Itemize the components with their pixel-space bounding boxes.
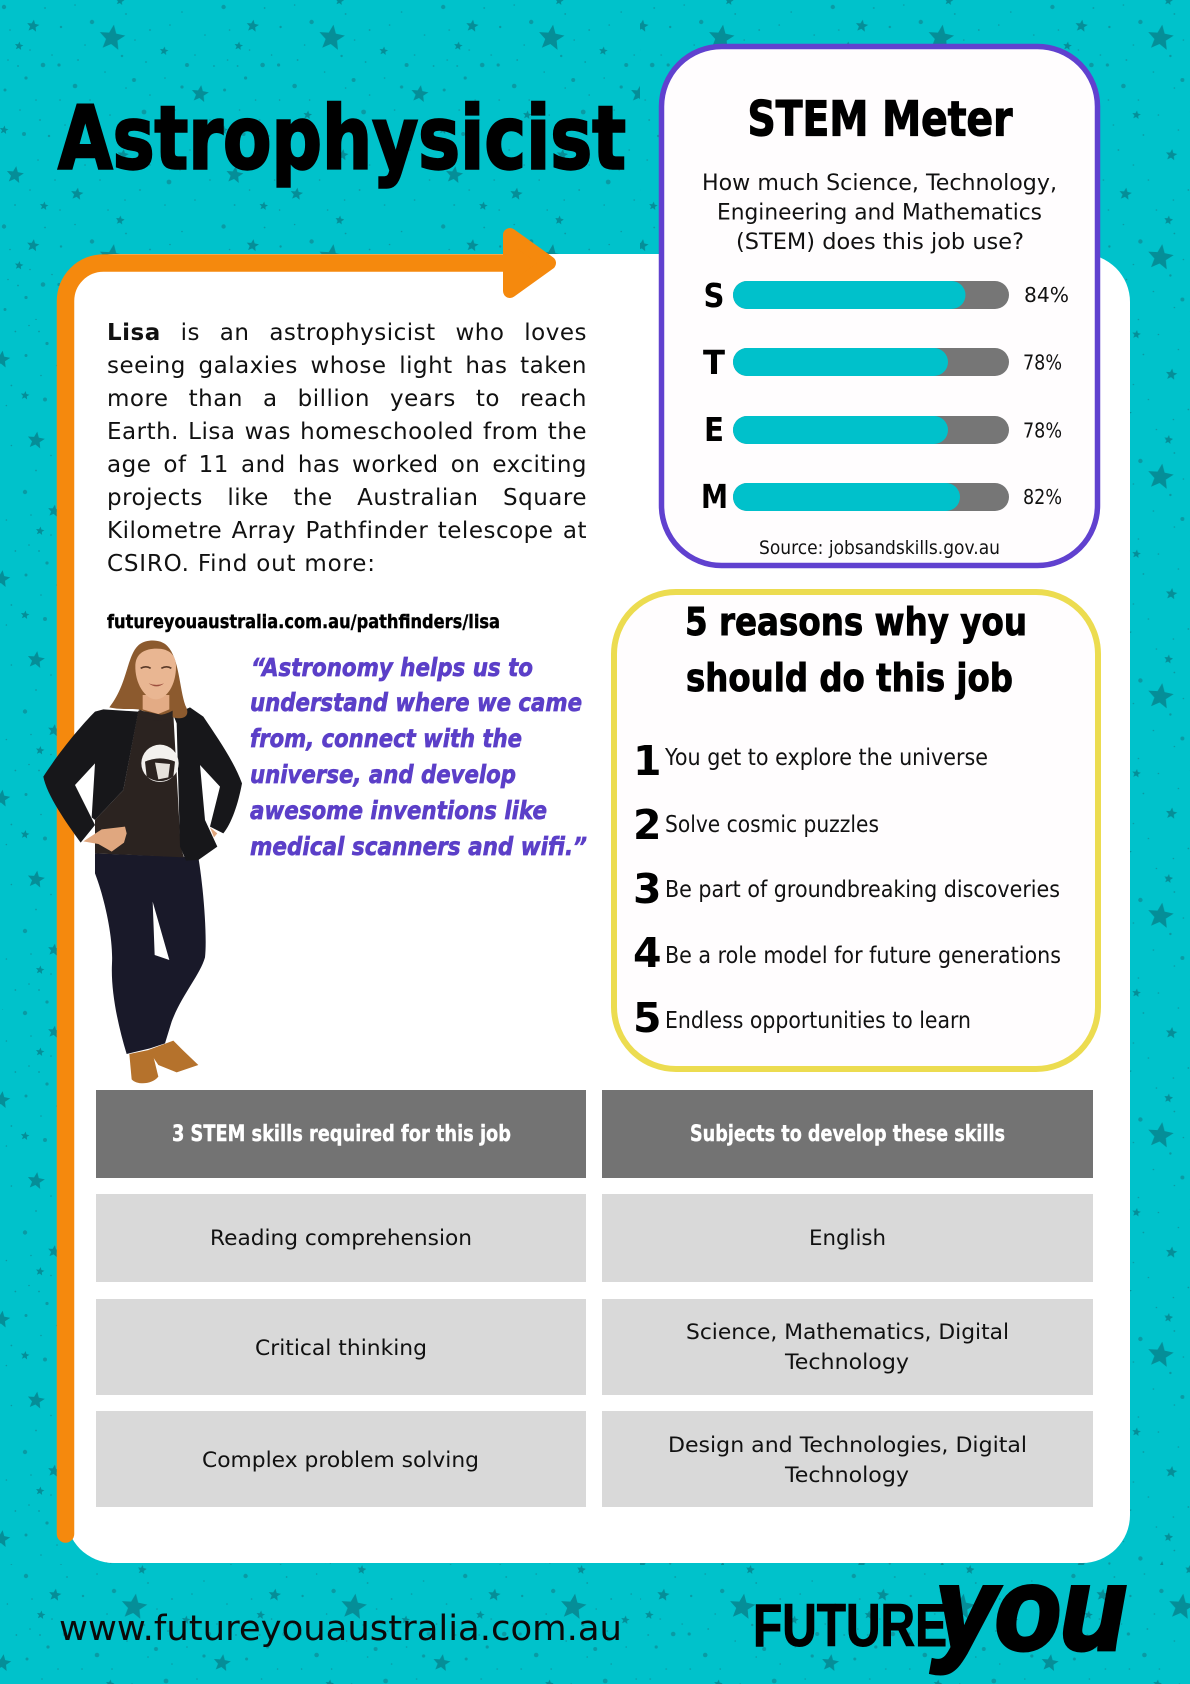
description: (STEM) does this job use? (736, 230, 1024, 255)
intro paragraph: CSIRO. Find out more: (107, 551, 376, 577)
reason 2 (633, 801, 879, 849)
link: pathfinder profile: futureyouaustralia.com.au/pathfinders/lisa (107, 611, 500, 633)
description: How much Science, Technology, (702, 171, 1057, 196)
reason 1: 1 (633, 737, 662, 785)
shirt (95, 711, 184, 857)
row: Critical thinking (96, 1299, 586, 1395)
row: English (602, 1194, 1093, 1282)
illustration: Lisa standing with hands on hips (43, 640, 242, 1083)
reason 1: You get to explore the universe (664, 745, 988, 771)
reason 4: Be a role model for future generations (665, 943, 1061, 969)
table header: skills: 3 STEM skills required for this job (172, 1122, 511, 1147)
intro paragraph: more than a billion years to reach (107, 386, 587, 412)
source note: Source: jobsandskills.gov.au (759, 537, 1000, 559)
intro paragraph: seeing galaxies whose light has taken (107, 353, 587, 379)
logo: Future You: FUTURE (753, 1592, 947, 1659)
logo: Future You: you (931, 1544, 1126, 1674)
neck (143, 695, 169, 714)
quote: universe, and develop (250, 760, 516, 789)
reason 1 (633, 737, 988, 785)
arrow: orange line with arrowhead (66, 235, 549, 1534)
bar: Engineering 78%: 78% (1023, 418, 1062, 442)
bar: Engineering 78%: E (704, 410, 724, 449)
hand (83, 827, 127, 852)
quote (250, 653, 587, 861)
bar: Mathematics 82% (701, 477, 1062, 516)
face (135, 649, 176, 699)
heading: 5 reasons: 5 reasons why you (685, 600, 1027, 644)
reason 3 (633, 865, 1060, 913)
bar: Science 84%: 84% (1024, 283, 1069, 307)
bar: Technology 78%: 78% (1023, 350, 1062, 374)
bar: Science 84% (704, 276, 1069, 315)
collar (139, 709, 173, 720)
intro paragraph: Kilometre Array Pathfinder telescope at (107, 518, 587, 544)
intro paragraph: projects like the Australian Square (107, 485, 587, 511)
row: Reading comprehension (96, 1194, 586, 1282)
row: Science, Mathematics, Digital Technology: Technology (784, 1350, 909, 1375)
shoes (129, 1041, 198, 1083)
logo: Future You (753, 1544, 1126, 1674)
reason 5: Endless opportunities to learn (665, 1008, 971, 1034)
shirt emblem: astronaut helmet (141, 745, 179, 782)
table header: subjects (602, 1090, 1093, 1178)
title: Astrophysicist (58, 88, 626, 190)
description (702, 171, 1057, 255)
row: Complex problem solving (96, 1411, 586, 1507)
intro paragraph: Earth. Lisa was homeschooled from the (107, 419, 587, 445)
reason 2: 2 (633, 801, 662, 849)
heading: 5 reasons (685, 600, 1027, 700)
reason 5: 5 (633, 994, 662, 1042)
row: Critical thinking: Critical thinking (255, 1336, 427, 1361)
reason 2: Solve cosmic puzzles (665, 812, 879, 838)
bar: Science 84%: S (704, 276, 724, 315)
panel: STEM meter (662, 46, 1098, 566)
row: Reading comprehension: Reading comprehension (210, 1226, 472, 1251)
bar: Engineering 78% (704, 410, 1062, 449)
reason 3: Be part of groundbreaking discoveries (665, 877, 1060, 903)
reason 3: 3 (633, 865, 662, 913)
jacket right side and arm (173, 707, 242, 861)
quote: awesome inventions like (250, 796, 547, 825)
bar: Technology 78% (703, 343, 1062, 382)
row: Design and Technologies, Digital Technology: Design and Technologies, Digital (668, 1433, 1027, 1458)
footer website: www.futureyouaustralia.com.au (59, 1609, 622, 1649)
table: subjects column (602, 1090, 1093, 1507)
heading: STEM Meter: STEM Meter (748, 92, 1013, 148)
bar: Mathematics 82%: M (701, 477, 728, 516)
row: Complex problem solving: Complex problem solving (202, 1448, 479, 1473)
reason 4: 4 (633, 929, 662, 977)
table: skills column (96, 1090, 586, 1507)
reason 5 (633, 994, 971, 1042)
row: Design and Technologies, Digital Technology (602, 1411, 1093, 1507)
quote: “Astronomy helps us to (251, 653, 533, 682)
quote: from, connect with the (250, 724, 522, 753)
jacket left side and arm (43, 709, 138, 843)
table header: skills (96, 1090, 586, 1178)
reason 4 (633, 929, 1061, 977)
trousers (95, 853, 206, 1054)
intro paragraph (107, 320, 587, 577)
description: Engineering and Mathematics (717, 200, 1042, 226)
row: English: English (809, 1226, 886, 1251)
table header: subjects: Subjects to develop these skills (690, 1122, 1005, 1147)
quote: medical scanners and wifi.” (250, 832, 587, 861)
quote: understand where we came (250, 688, 582, 717)
other hand (210, 827, 217, 837)
eyes and smile (141, 667, 171, 686)
panel: 5 reasons (614, 592, 1098, 1069)
intro paragraph: age of 11 and has worked on exciting (107, 452, 587, 478)
intro paragraph: Lisa is an astrophysicist who loves (107, 320, 587, 346)
bar: Technology 78%: T (703, 343, 725, 382)
white content panel (66, 254, 1130, 1563)
row: Science, Mathematics, Digital Technology (602, 1299, 1093, 1395)
row: Science, Mathematics, Digital Technology: Science, Mathematics, Digital (686, 1320, 1009, 1345)
bar: Mathematics 82%: 82% (1023, 485, 1062, 509)
heading: 5 reasons: should do this job (686, 656, 1013, 700)
hair (109, 640, 187, 718)
row: Design and Technologies, Digital Technology: Technology (784, 1463, 909, 1488)
